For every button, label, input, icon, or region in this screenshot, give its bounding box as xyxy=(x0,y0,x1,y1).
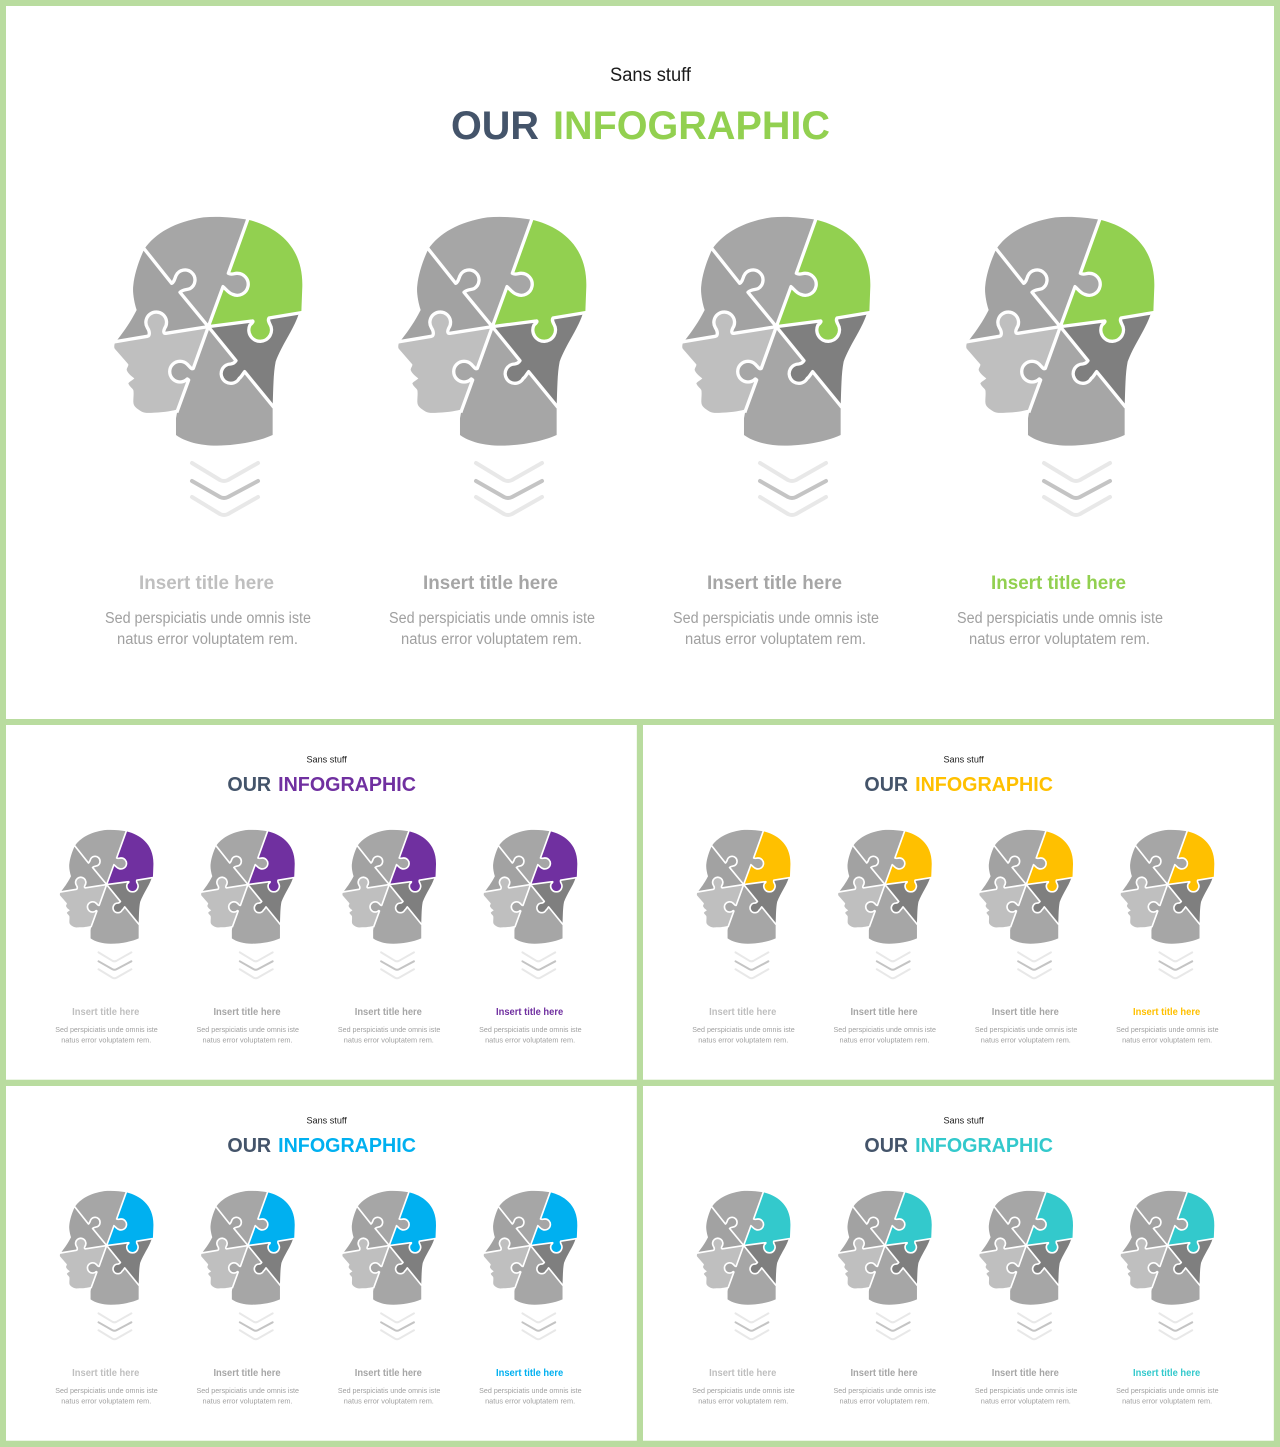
icon: puzzle head xyxy=(201,1191,295,1305)
icon: puzzle head xyxy=(60,1191,153,1305)
title: INFOGRAPHIC xyxy=(915,1135,1053,1157)
chevrons xyxy=(1044,463,1110,515)
column 3 xyxy=(338,1191,440,1405)
column text: natus error voluptatem rem. xyxy=(344,1035,434,1044)
chevrons xyxy=(877,952,910,978)
chevrons xyxy=(877,1313,910,1339)
chevrons xyxy=(99,1313,131,1339)
panel: green main slide xyxy=(6,6,1274,719)
chevrons xyxy=(522,952,555,978)
column text: natus error voluptatem rem. xyxy=(485,1035,575,1044)
column text: natus error voluptatem rem. xyxy=(981,1035,1071,1044)
panel: purple slide xyxy=(6,725,637,1080)
column title: Insert title here xyxy=(709,1368,777,1379)
title: OUR xyxy=(864,774,908,796)
chevrons xyxy=(240,1313,273,1339)
chevrons xyxy=(381,1313,414,1339)
subtitle: Sans stuff xyxy=(943,754,984,765)
column title: Insert title here xyxy=(355,1007,422,1018)
icon: puzzle head xyxy=(697,830,790,944)
icon: puzzle head xyxy=(682,217,870,446)
column text: Sed perspiciatis unde omnis iste xyxy=(1116,1386,1219,1395)
subtitle: Sans stuff xyxy=(306,754,347,765)
column text: natus error voluptatem rem. xyxy=(698,1035,788,1044)
icon: puzzle head xyxy=(342,1191,436,1305)
icon: puzzle head xyxy=(398,217,586,446)
column text: Sed perspiciatis unde omnis iste xyxy=(479,1386,582,1395)
title: OUR xyxy=(227,774,271,796)
subtitle: Sans stuff xyxy=(306,1115,347,1126)
chevrons xyxy=(240,952,273,978)
chevrons xyxy=(1159,952,1192,978)
title: INFOGRAPHIC xyxy=(278,1135,416,1157)
column text: natus error voluptatem rem. xyxy=(1122,1035,1212,1044)
column text: natus error voluptatem rem. xyxy=(969,631,1150,648)
chevrons xyxy=(476,463,542,515)
column 3 xyxy=(673,217,879,648)
icon: puzzle head xyxy=(60,830,153,944)
panel: teal slide xyxy=(643,1086,1274,1441)
column text: natus error voluptatem rem. xyxy=(1122,1396,1212,1405)
icon: puzzle head xyxy=(979,830,1073,944)
title: INFOGRAPHIC xyxy=(553,104,830,148)
column 1 xyxy=(55,1191,158,1405)
column title: Insert title here xyxy=(992,1368,1059,1379)
icon: puzzle head xyxy=(966,217,1154,446)
column text: Sed perspiciatis unde omnis iste xyxy=(55,1025,158,1034)
column text: Sed perspiciatis unde omnis iste xyxy=(673,610,879,627)
column text: Sed perspiciatis unde omnis iste xyxy=(692,1025,795,1034)
column 4 xyxy=(479,1191,582,1405)
column text: natus error voluptatem rem. xyxy=(203,1035,293,1044)
icon: puzzle head xyxy=(838,830,932,944)
column text: natus error voluptatem rem. xyxy=(981,1396,1071,1405)
column title: Insert title here xyxy=(72,1368,140,1379)
panel: yellow slide xyxy=(643,725,1274,1080)
column title: Insert title here xyxy=(423,572,558,594)
column text: Sed perspiciatis unde omnis iste xyxy=(389,610,595,627)
column 4 xyxy=(957,217,1163,648)
column title: Insert title here xyxy=(707,572,842,594)
column text: natus error voluptatem rem. xyxy=(61,1396,151,1405)
column 2 xyxy=(389,217,595,648)
column title: Insert title here xyxy=(139,572,274,594)
column title: Insert title here xyxy=(213,1368,281,1379)
column title: Insert title here xyxy=(1133,1007,1201,1018)
chevrons xyxy=(99,952,131,978)
title: INFOGRAPHIC xyxy=(915,774,1053,796)
title: OUR xyxy=(227,1135,271,1157)
chevrons xyxy=(760,463,826,515)
icon: puzzle head xyxy=(201,830,295,944)
column text: Sed perspiciatis unde omnis iste xyxy=(1116,1025,1219,1034)
column title: Insert title here xyxy=(213,1007,281,1018)
column title: Insert title here xyxy=(850,1368,918,1379)
column text: Sed perspiciatis unde omnis iste xyxy=(975,1025,1077,1034)
icon: puzzle head xyxy=(838,1191,932,1305)
chevrons xyxy=(1018,1313,1051,1339)
icon: puzzle head xyxy=(114,217,302,446)
column 3 xyxy=(975,830,1077,1044)
icon: puzzle head xyxy=(697,1191,790,1305)
column text: Sed perspiciatis unde omnis iste xyxy=(338,1386,440,1395)
column text: natus error voluptatem rem. xyxy=(698,1396,788,1405)
column text: natus error voluptatem rem. xyxy=(485,1396,575,1405)
chevrons xyxy=(736,1313,768,1339)
column title: Insert title here xyxy=(72,1007,140,1018)
column text: natus error voluptatem rem. xyxy=(840,1396,930,1405)
column text: Sed perspiciatis unde omnis iste xyxy=(975,1386,1077,1395)
column text: Sed perspiciatis unde omnis iste xyxy=(105,610,311,627)
column title: Insert title here xyxy=(496,1368,564,1379)
column text: natus error voluptatem rem. xyxy=(61,1035,151,1044)
chevrons xyxy=(736,952,768,978)
icon: puzzle head xyxy=(342,830,436,944)
column 2 xyxy=(197,1191,299,1405)
column 4 xyxy=(1116,1191,1219,1405)
icon: puzzle head xyxy=(484,1191,577,1305)
column text: Sed perspiciatis unde omnis iste xyxy=(957,610,1163,627)
column text: natus error voluptatem rem. xyxy=(685,631,866,648)
column 3 xyxy=(975,1191,1077,1405)
column 3 xyxy=(338,830,440,1044)
column 1 xyxy=(692,830,795,1044)
column 4 xyxy=(479,830,582,1044)
column title: Insert title here xyxy=(992,1007,1059,1018)
column text: natus error voluptatem rem. xyxy=(344,1396,434,1405)
column text: natus error voluptatem rem. xyxy=(117,631,298,648)
column title: Insert title here xyxy=(496,1007,564,1018)
chevrons xyxy=(1018,952,1051,978)
column text: Sed perspiciatis unde omnis iste xyxy=(692,1386,795,1395)
column 4 xyxy=(1116,830,1219,1044)
column 1 xyxy=(105,217,311,648)
column text: Sed perspiciatis unde omnis iste xyxy=(197,1025,299,1034)
chevrons xyxy=(381,952,414,978)
column text: Sed perspiciatis unde omnis iste xyxy=(197,1386,299,1395)
title: INFOGRAPHIC xyxy=(278,774,416,796)
column text: Sed perspiciatis unde omnis iste xyxy=(834,1386,936,1395)
subtitle: Sans stuff xyxy=(610,65,692,86)
icon: puzzle head xyxy=(1121,1191,1214,1305)
icon: puzzle head xyxy=(484,830,577,944)
title: OUR xyxy=(864,1135,908,1157)
column text: Sed perspiciatis unde omnis iste xyxy=(55,1386,158,1395)
column 2 xyxy=(834,1191,936,1405)
column title: Insert title here xyxy=(709,1007,777,1018)
column title: Insert title here xyxy=(355,1368,422,1379)
column text: Sed perspiciatis unde omnis iste xyxy=(479,1025,582,1034)
column text: Sed perspiciatis unde omnis iste xyxy=(338,1025,440,1034)
column 1 xyxy=(55,830,158,1044)
panel: blue slide xyxy=(6,1086,637,1441)
column 1 xyxy=(692,1191,795,1405)
subtitle: Sans stuff xyxy=(943,1115,984,1126)
chevrons xyxy=(192,463,258,515)
column text: natus error voluptatem rem. xyxy=(203,1396,293,1405)
chevrons xyxy=(522,1313,555,1339)
column title: Insert title here xyxy=(991,572,1126,594)
column text: natus error voluptatem rem. xyxy=(401,631,582,648)
column 2 xyxy=(197,830,299,1044)
column title: Insert title here xyxy=(1133,1368,1201,1379)
column 2 xyxy=(834,830,936,1044)
title: OUR xyxy=(451,104,539,148)
icon: puzzle head xyxy=(979,1191,1073,1305)
icon: puzzle head xyxy=(1121,830,1214,944)
column title: Insert title here xyxy=(850,1007,918,1018)
column text: natus error voluptatem rem. xyxy=(840,1035,930,1044)
column text: Sed perspiciatis unde omnis iste xyxy=(834,1025,936,1034)
chevrons xyxy=(1159,1313,1192,1339)
